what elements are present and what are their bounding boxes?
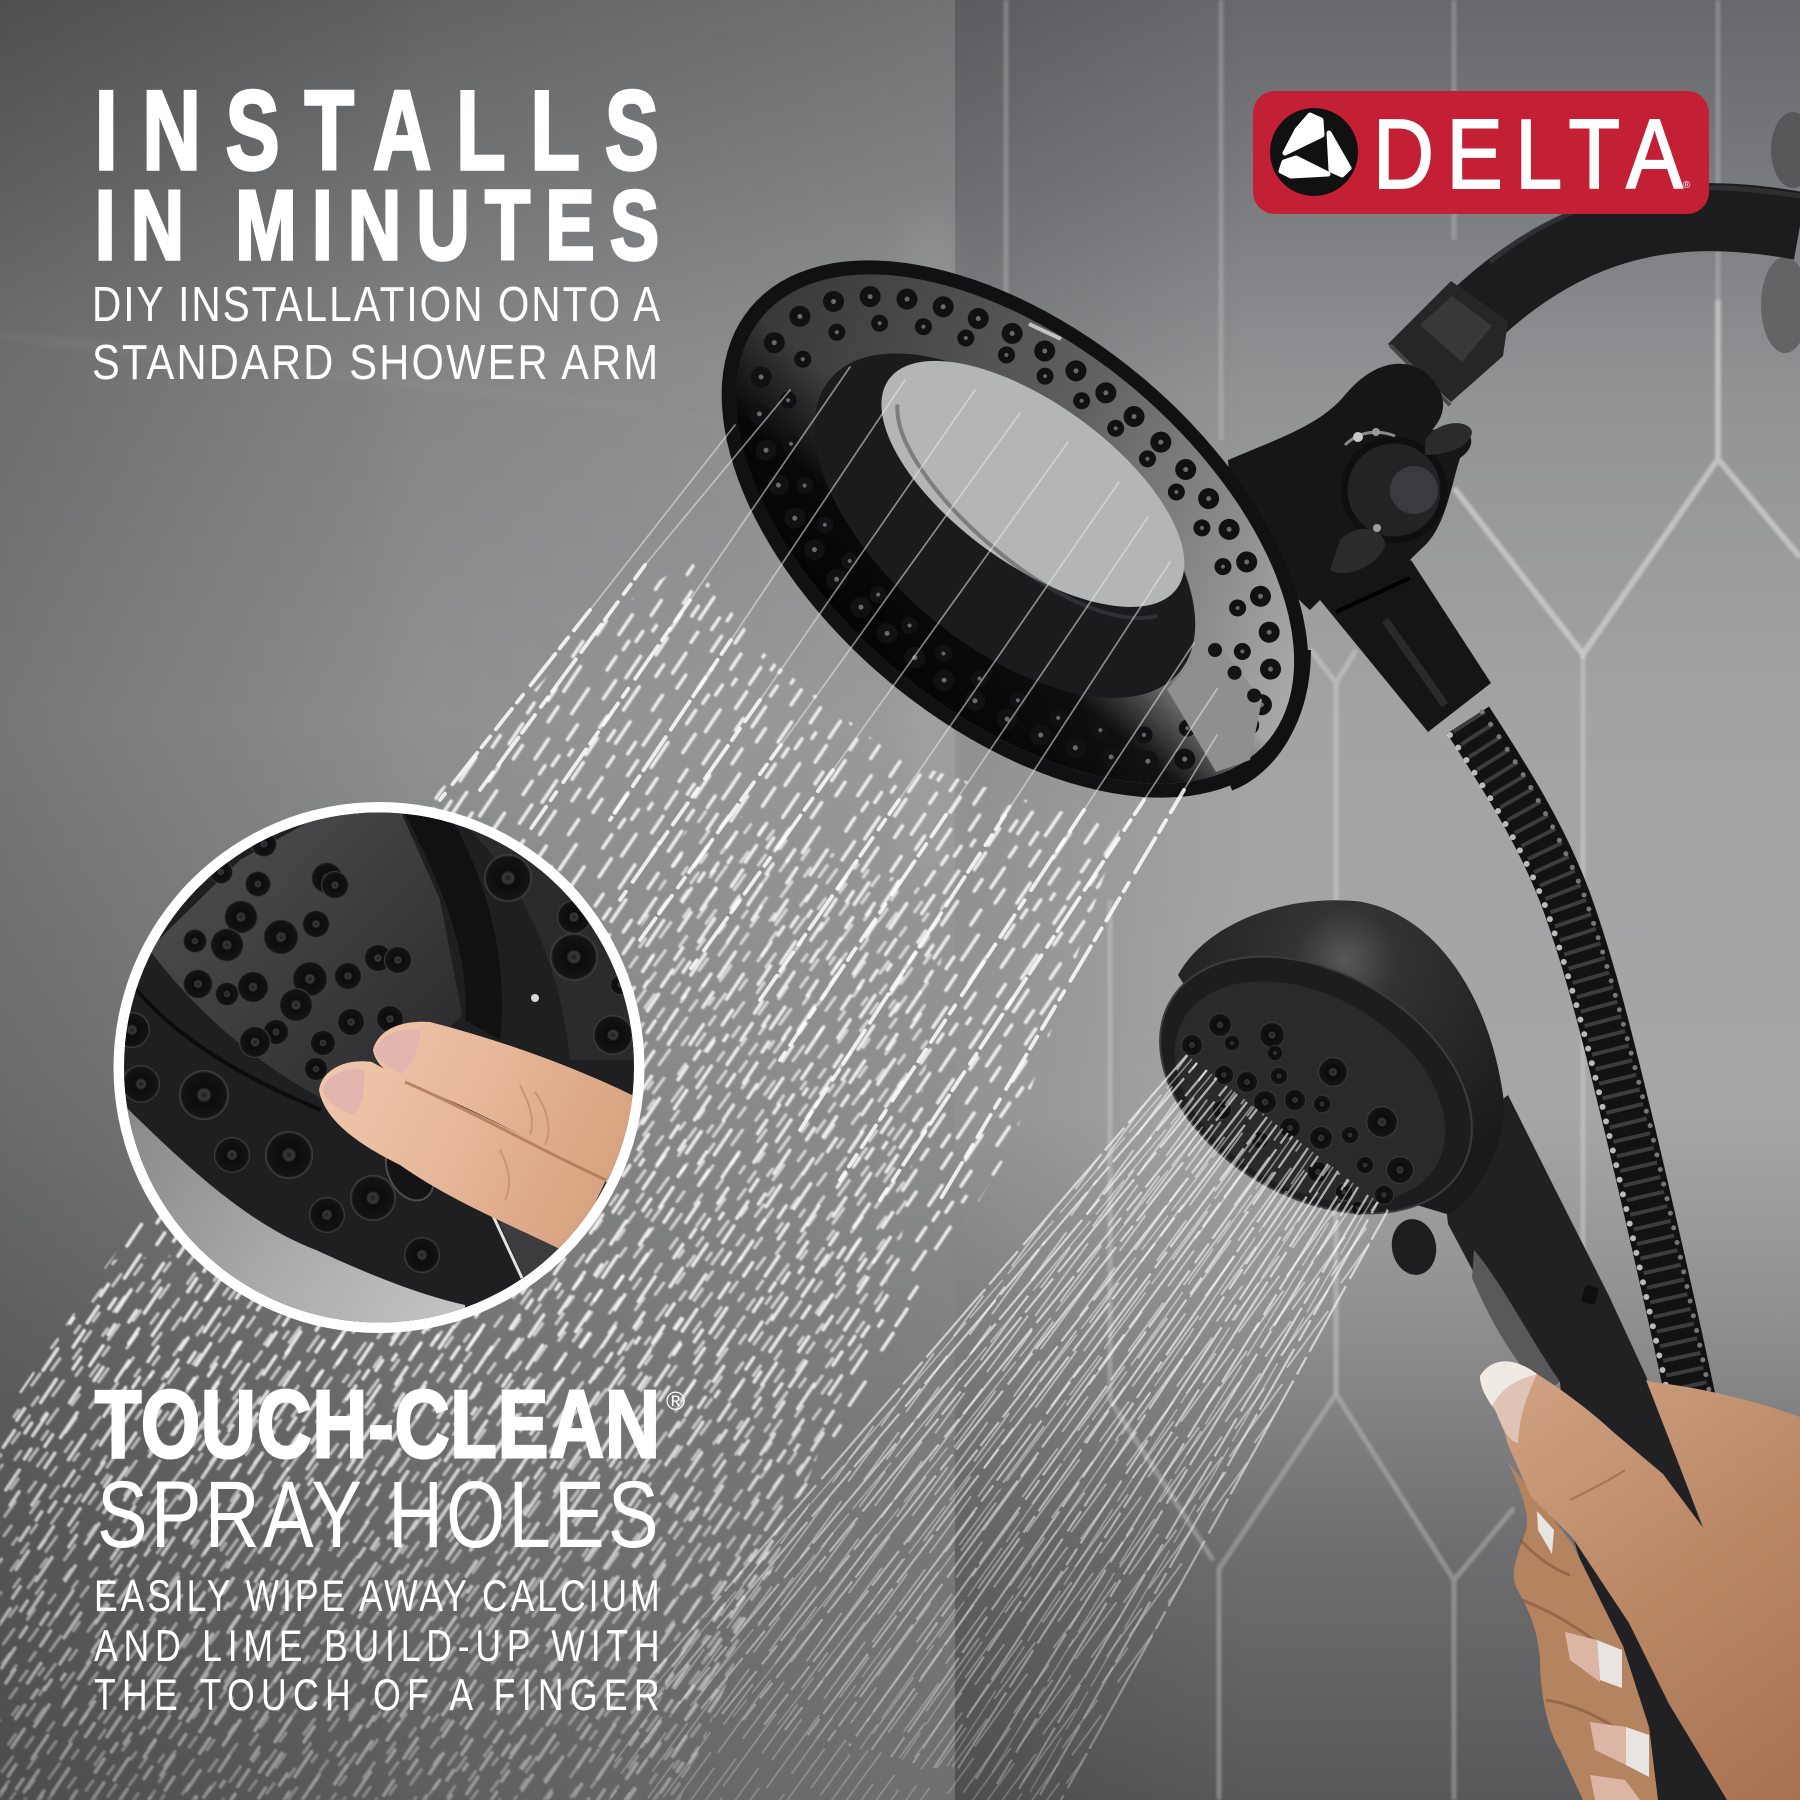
face nozzles xyxy=(114,831,633,1273)
fingers xyxy=(1508,1462,1658,1800)
centre opening xyxy=(842,315,1224,653)
heading: installs in minutes: INSTALLS xyxy=(95,68,659,193)
text block: easily wipe away: EASILY WIPE AWAY CALCIUM xyxy=(94,1571,660,1621)
dome xyxy=(1178,900,1504,1215)
nozzle band xyxy=(644,176,1386,882)
water droplets: main spray xyxy=(0,560,1120,1800)
hand shower water spray xyxy=(600,1055,1388,1800)
heading: touch-clean spray holes: TOUCH-CLEAN xyxy=(95,1372,660,1478)
lower finger xyxy=(319,1061,606,1250)
nozzles xyxy=(1181,1013,1414,1215)
text block: easily wipe away: AND LIME BUILD-UP WITH xyxy=(94,1621,660,1671)
braided hose xyxy=(1450,712,1710,1405)
water jets from main head xyxy=(440,367,1217,1200)
spray plate xyxy=(149,810,462,1098)
dark shower face xyxy=(124,812,634,1322)
shower arm and flange xyxy=(1470,112,1800,353)
outer rim xyxy=(623,156,1407,902)
logo wordmark: DELTA xyxy=(1373,100,1683,209)
dark lower-right segment xyxy=(480,1170,570,1280)
diverter and connector xyxy=(1228,281,1508,732)
tile grout lines xyxy=(1006,0,1800,1800)
holding hand xyxy=(1480,1361,1800,1800)
small switch bump xyxy=(377,1132,443,1208)
upper finger xyxy=(373,1022,650,1190)
face rim xyxy=(1115,904,1517,1266)
registered mark: ® xyxy=(1683,180,1691,191)
hand shower: head xyxy=(1115,900,1517,1266)
heading: installs in minutes xyxy=(95,68,659,280)
nozzle rows xyxy=(677,208,1353,850)
thumb and palm xyxy=(1497,1374,1800,1800)
fingernails xyxy=(1537,1511,1649,1800)
Delta logo badge xyxy=(1253,91,1709,214)
white border xyxy=(114,802,644,1333)
rim highlight and silver edge piece xyxy=(1029,324,1305,785)
heading: installs in minutes: IN MINUTES xyxy=(95,172,659,280)
hand shower: spray lever xyxy=(1387,1216,1441,1278)
heading: touch-clean spray holes xyxy=(95,1372,685,1568)
text block: DIY installation: STANDARD SHOWER ARM xyxy=(92,335,658,390)
silver background strip xyxy=(127,1108,465,1322)
main rain shower head xyxy=(623,156,1407,902)
logo emblem xyxy=(1270,108,1358,196)
text block: DIY installation xyxy=(92,276,661,390)
face plate xyxy=(1136,936,1484,1248)
inner well xyxy=(754,289,1255,763)
inset circle: touch-clean close-up xyxy=(110,800,650,1340)
text block: easily wipe away xyxy=(94,1571,660,1720)
hand shower: handle xyxy=(1440,1095,1727,1800)
thumb nail xyxy=(1480,1361,1537,1443)
text block: DIY installation: DIY INSTALLATION ONTO A xyxy=(92,276,661,332)
heading: touch-clean spray holes: SPRAY HOLES xyxy=(97,1462,659,1568)
fingernails xyxy=(322,1029,420,1115)
heading: touch-clean spray holes: ® xyxy=(666,1386,685,1416)
text block: easily wipe away: THE TOUCH OF A FINGER xyxy=(94,1670,660,1720)
